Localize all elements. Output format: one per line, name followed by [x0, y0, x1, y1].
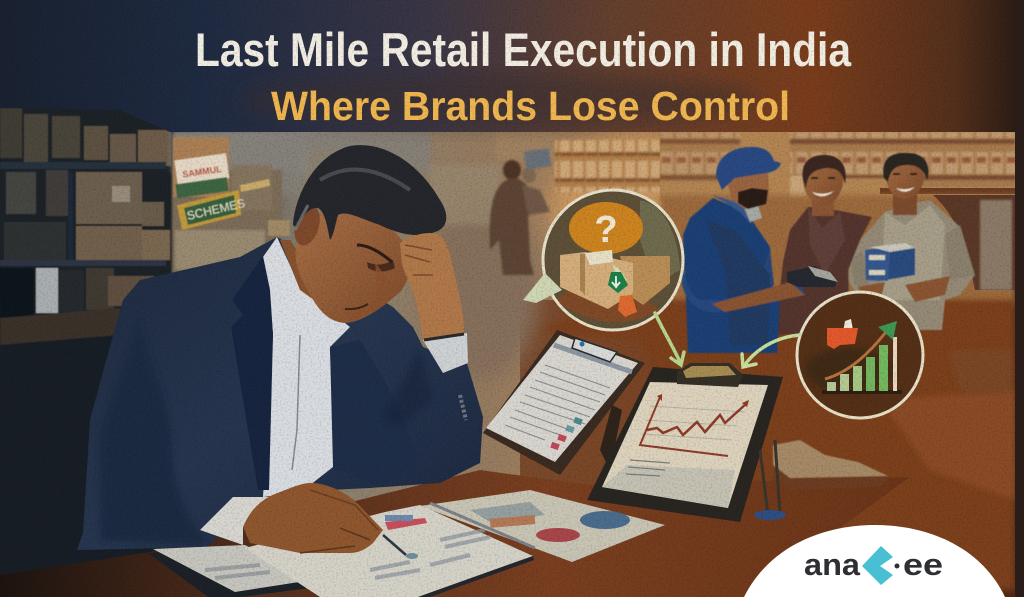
desk — [0, 470, 910, 597]
neck — [280, 240, 345, 322]
logo wordmark left: ana — [804, 547, 861, 582]
shirt — [263, 237, 350, 497]
background scene — [172, 132, 1015, 597]
service counter — [540, 300, 1015, 590]
jacket lapel — [231, 256, 273, 490]
desk papers and charts — [148, 490, 665, 597]
hair — [293, 145, 446, 240]
bar chart with growth arrow — [822, 321, 902, 394]
icon: pale green pointer — [523, 273, 562, 303]
face — [295, 212, 411, 323]
shirt cuff and watch — [423, 333, 468, 373]
left storeroom shelves with boxes — [0, 100, 172, 345]
arrow: from boxes circle to clipboard — [655, 313, 684, 365]
writing arm cuff — [200, 497, 270, 545]
icon circle: growth bars — [797, 292, 923, 418]
logo separator dot — [894, 564, 900, 568]
writing hand and pen — [243, 483, 418, 559]
arrow: from growth circle to clipboard — [742, 335, 800, 367]
distant warehouse and product shelves — [172, 132, 1016, 305]
delivery worker in blue uniform — [682, 147, 805, 353]
report: right sheet — [420, 490, 665, 562]
logo wordmark right: ee — [903, 547, 943, 582]
right edge strip — [1015, 0, 1024, 597]
logo diamond mark — [862, 546, 893, 585]
head hand — [400, 233, 464, 340]
report: centre sheet — [245, 503, 535, 597]
promotional signs: schemes: SCHEMES — [186, 196, 246, 223]
icon: orange question bubble: ? — [594, 209, 618, 251]
icon: blue box held by shopkeeper — [865, 243, 915, 281]
title line 2: Where Brands Lose Control — [271, 83, 790, 129]
clipboard: trend chart — [587, 363, 786, 522]
title line 1: Last Mile Retail Execution in India — [195, 23, 852, 76]
right shopkeeper in beige shirt — [848, 153, 975, 330]
top title band — [0, 0, 1015, 132]
middle shopkeeper in maroon shirt — [775, 155, 872, 335]
ear — [290, 202, 324, 248]
main businessman — [77, 145, 483, 550]
icon: green and orange down tags — [608, 272, 637, 317]
promotional signs: schemes — [173, 137, 290, 236]
shop staff group — [682, 147, 975, 353]
icon: orange flag with paper — [827, 319, 858, 349]
icon: cardboard boxes — [560, 250, 670, 309]
report: left open page — [148, 545, 318, 597]
logo badge — [744, 525, 1005, 597]
background figures in warehouse — [490, 148, 551, 275]
icon circle: question mark and boxes — [543, 190, 683, 330]
jacket — [77, 237, 483, 550]
clipboard stand foot — [754, 510, 786, 520]
handheld device — [787, 266, 838, 287]
paper stack on desk — [772, 440, 890, 490]
clipboard: checklist — [483, 330, 645, 475]
promotional signs: schemes: SAMMUL — [182, 164, 223, 179]
